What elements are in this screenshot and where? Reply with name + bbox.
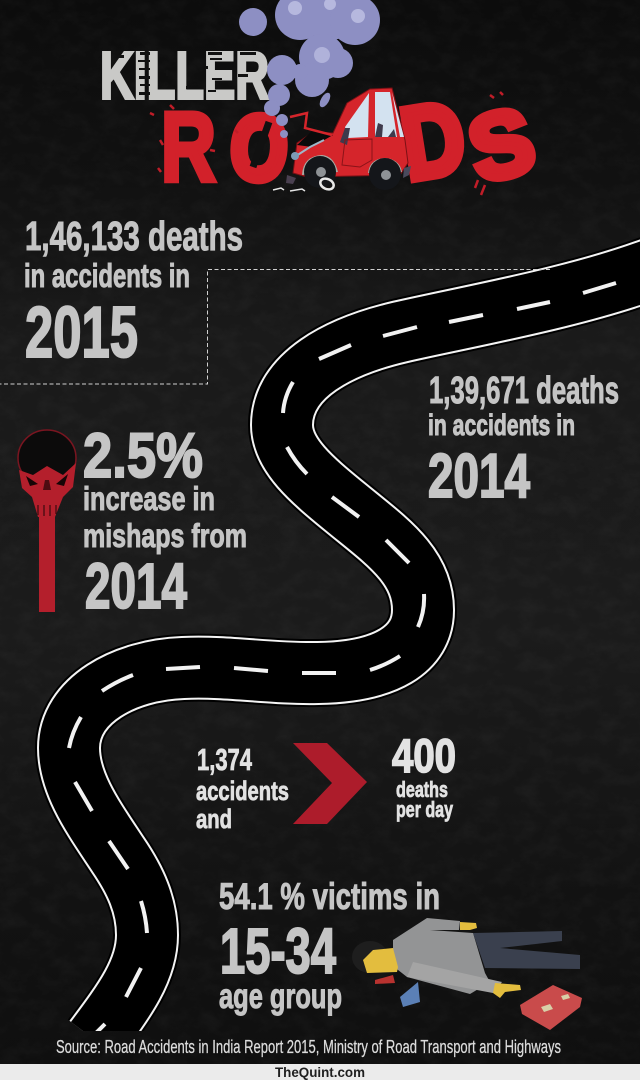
jacket bbox=[393, 918, 490, 994]
text block: 400 deaths per day: 400 bbox=[392, 729, 456, 782]
hands bbox=[460, 922, 521, 998]
text block: 400 deaths per day bbox=[392, 729, 456, 822]
text block: 400 deaths per day: deaths bbox=[396, 777, 448, 802]
tie bbox=[400, 982, 420, 1007]
head bbox=[363, 948, 398, 973]
text block: age group bbox=[219, 876, 440, 1016]
briefcase bbox=[520, 985, 582, 1030]
footer band bbox=[0, 1064, 640, 1080]
footer band: TheQuint.com bbox=[275, 1065, 365, 1080]
text block: 2014 deaths: in accidents in bbox=[428, 409, 575, 442]
car body bbox=[293, 88, 408, 177]
blood bbox=[375, 975, 395, 984]
title: ROADS: O bbox=[228, 97, 290, 201]
text block: age group: age group bbox=[219, 977, 342, 1016]
text block: 2.5% increase: 2014 bbox=[85, 550, 187, 622]
text block: 2014 deaths bbox=[428, 370, 619, 511]
text block: 1,374 accidents: and bbox=[196, 804, 232, 834]
text block: 2.5% increase: 2.5% bbox=[83, 421, 203, 491]
text block: age group: 15-34 bbox=[220, 915, 336, 987]
trousers bbox=[473, 931, 580, 969]
text block: age group: 54.1 % victims in bbox=[219, 876, 440, 917]
text block: 1,374 accidents: accidents bbox=[196, 776, 289, 806]
text block: 400 deaths per day: per day bbox=[396, 797, 454, 822]
car door bbox=[342, 139, 372, 167]
title: KILLER bbox=[100, 38, 269, 114]
text block: 1,374 accidents: 1,374 bbox=[197, 742, 253, 777]
dashed connector bbox=[0, 270, 550, 384]
text block: 2015 deaths: in accidents in bbox=[24, 257, 190, 294]
title: ROADS: S bbox=[459, 88, 544, 202]
text block: 2015 deaths: 2015 bbox=[25, 293, 138, 373]
icon: red chevron arrow bbox=[293, 743, 367, 824]
winding road bbox=[69, 266, 640, 1040]
title: ROADS: R bbox=[161, 92, 216, 202]
popped hood and engine bbox=[290, 113, 333, 160]
smoke cloud bbox=[239, 0, 380, 138]
text block: 2015 deaths bbox=[24, 213, 243, 373]
title: ROADS: D bbox=[394, 79, 473, 202]
text block: 2.5% increase bbox=[83, 421, 247, 622]
text block: 2.5% increase: mishaps from bbox=[83, 517, 247, 554]
text block: 2015 deaths: 1,46,133 deaths bbox=[25, 213, 243, 259]
text block: 2014 deaths: 2014 bbox=[428, 442, 530, 511]
car wheels bbox=[273, 155, 411, 191]
text block: 2.5% increase: increase in bbox=[83, 480, 215, 517]
car windows bbox=[340, 92, 404, 145]
text block: 1,374 accidents bbox=[196, 742, 289, 834]
illustration: fallen man with briefcase bbox=[352, 918, 582, 1030]
title: KILLER: KILLER bbox=[100, 38, 269, 114]
icon: red skull on pole bbox=[18, 430, 76, 612]
illustration: crashed red car bbox=[273, 88, 411, 191]
title: ROADS bbox=[150, 79, 544, 202]
